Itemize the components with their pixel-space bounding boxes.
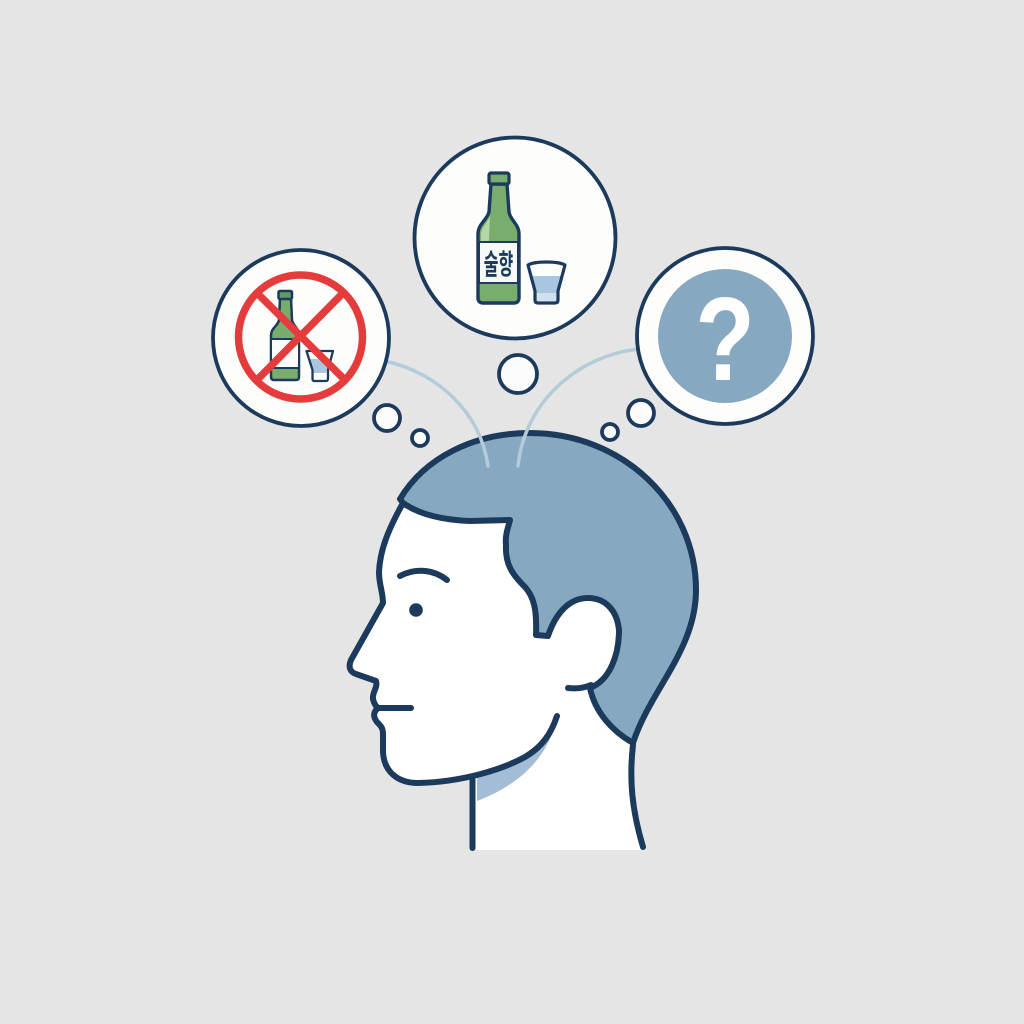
icon: shot glass (528, 262, 565, 303)
prohibition sign (238, 275, 362, 399)
neck shadow (477, 718, 557, 801)
head and neck silhouette (350, 433, 696, 850)
face outline (350, 503, 557, 783)
hair (400, 433, 696, 743)
back of neck line (631, 745, 643, 847)
panel: question mark (637, 248, 813, 424)
thought connector curves (385, 349, 639, 466)
question mark: ? (695, 273, 755, 406)
question disc (658, 269, 792, 403)
ear lobe stroke (568, 685, 591, 688)
icon: soju bottle (478, 173, 519, 303)
panel: soju bottle and glass (414, 138, 616, 338)
icon: crossed-out glass (306, 351, 333, 381)
panel: no alcohol (213, 250, 389, 426)
thought bubbles: small circles (374, 355, 654, 446)
bottle label text: 술향 (484, 248, 513, 280)
eyebrow (400, 571, 447, 580)
front of neck line (470, 777, 476, 848)
icon: crossed-out bottle (271, 291, 299, 380)
mouth (378, 705, 411, 711)
eye (409, 603, 423, 617)
